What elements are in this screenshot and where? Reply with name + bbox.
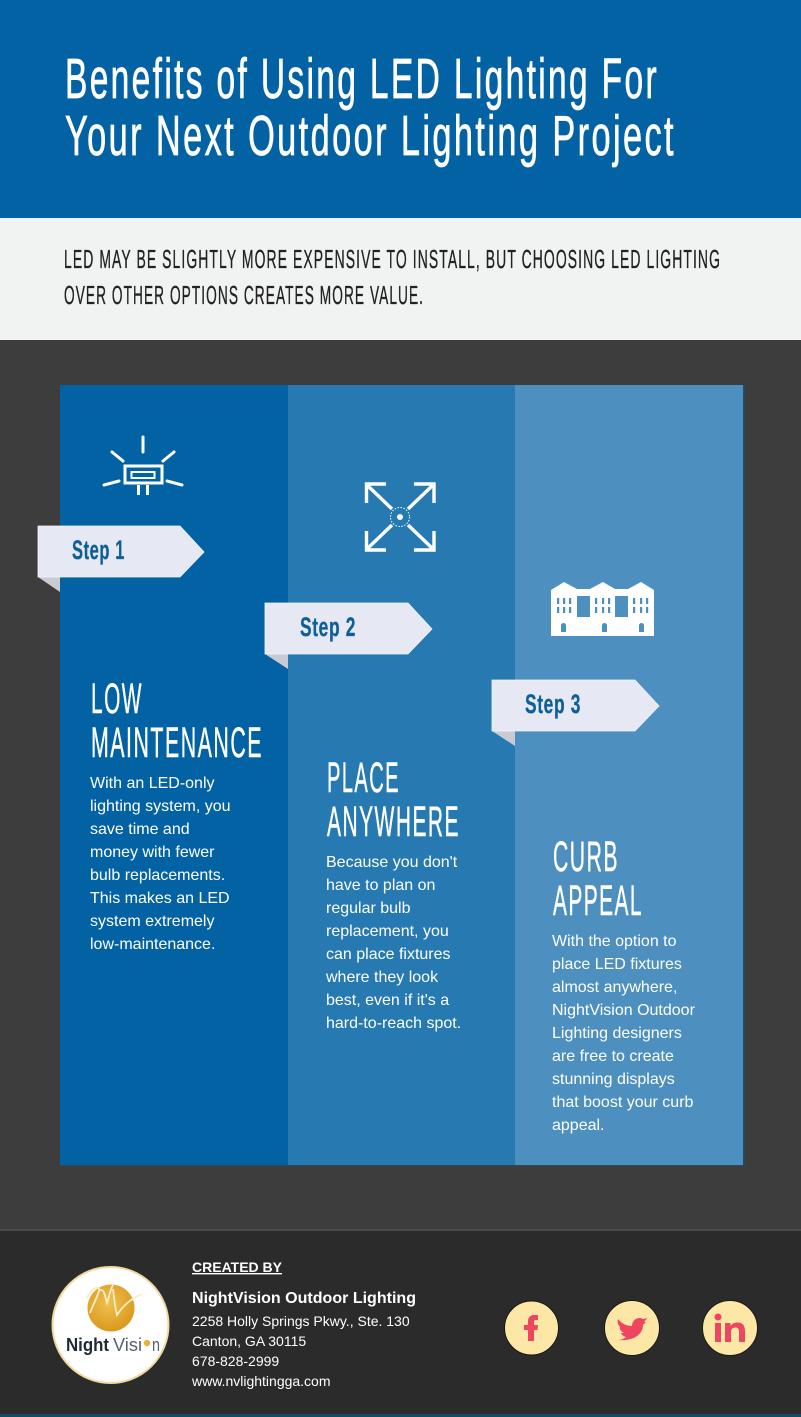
panel: step 1 low maintenance: MAINTENANCE bbox=[91, 719, 263, 767]
ribbon: step 1 bbox=[38, 526, 204, 592]
ribbon: step 3 bbox=[492, 680, 659, 746]
subtitle text bbox=[64, 244, 721, 310]
ribbon: step 3: Step 3 bbox=[525, 689, 581, 719]
body text: curb appeal: Lighting designers bbox=[552, 1025, 682, 1042]
ribbon: step 2: Step 2 bbox=[300, 612, 356, 642]
icon: linkedin bbox=[702, 1300, 758, 1356]
logo: n bbox=[152, 1335, 160, 1355]
body text: curb appeal: stunning displays bbox=[552, 1071, 675, 1088]
panel: step 2 place anywhere: ANYWHERE bbox=[327, 798, 460, 846]
body text: curb appeal: almost anywhere, bbox=[552, 979, 677, 996]
created by: www.nvlightingga.com bbox=[191, 1373, 331, 1389]
body text: place anywhere: regular bulb bbox=[326, 900, 411, 917]
body text: curb appeal: place LED fixtures bbox=[552, 956, 682, 973]
body text: low maintenance: system extremely bbox=[90, 913, 214, 930]
logo: Night bbox=[66, 1335, 109, 1355]
body text: low maintenance: lighting system, you bbox=[90, 798, 231, 815]
panel: step 2 place anywhere bbox=[288, 385, 515, 1165]
icon: expanding arrows bbox=[366, 484, 434, 550]
body text: place anywhere: can place fixtures bbox=[326, 946, 451, 963]
body text: curb appeal: NightVision Outdoor bbox=[552, 1002, 696, 1019]
icon: facebook bbox=[504, 1301, 558, 1355]
icon: outdoor light fixture bbox=[104, 437, 182, 495]
body text: place anywhere: replacement, you bbox=[326, 923, 449, 940]
logo bbox=[52, 1267, 168, 1383]
created by: 2258 Holly Springs Pkwy., Ste. 130 bbox=[192, 1313, 410, 1329]
created by: Canton, GA 30115 bbox=[192, 1333, 306, 1349]
icon: twitter bbox=[604, 1300, 660, 1356]
subtitle text: OVER OTHER OPTIONS CREATES MORE VALUE. bbox=[64, 280, 424, 310]
ribbon: step 1: Step 1 bbox=[72, 535, 125, 565]
body text: low maintenance: bulb replacements. bbox=[90, 867, 225, 884]
icon: buildings bbox=[551, 582, 654, 636]
panel: step 3 curb appeal bbox=[515, 385, 743, 1165]
body text: place anywhere: best, even if it's a bbox=[326, 992, 449, 1009]
body text: curb appeal: appeal. bbox=[552, 1117, 604, 1134]
body text: low maintenance: save time and bbox=[90, 821, 190, 838]
created by: CREATED BY bbox=[192, 1259, 283, 1275]
subtitle band bbox=[0, 218, 801, 340]
heading: curb appeal: CURB bbox=[553, 833, 619, 881]
created by: 678-828-2999 bbox=[192, 1353, 279, 1369]
panel: step 3 curb appeal: APPEAL bbox=[553, 877, 643, 925]
logo: Visi bbox=[113, 1335, 142, 1355]
body text: place anywhere bbox=[325, 854, 461, 1032]
body text: place anywhere: where they look bbox=[325, 969, 439, 986]
body text: low maintenance: low-maintenance. bbox=[90, 936, 215, 953]
body text: low maintenance: money with fewer bbox=[90, 844, 215, 861]
heading: low maintenance: LOW bbox=[91, 675, 143, 723]
panel: step 1 low maintenance bbox=[60, 385, 288, 1165]
title banner bbox=[0, 0, 801, 218]
footer bbox=[0, 1231, 801, 1417]
body text: place anywhere: Because you don't bbox=[326, 854, 458, 871]
heading: low maintenance bbox=[91, 675, 263, 767]
body text: low maintenance: With an LED-only bbox=[90, 775, 214, 792]
title bbox=[65, 47, 676, 168]
heading: place anywhere bbox=[327, 754, 460, 846]
body text: low maintenance bbox=[90, 775, 231, 953]
body text: curb appeal: With the option to bbox=[552, 933, 677, 950]
body text: curb appeal: are free to create bbox=[552, 1048, 674, 1065]
body text: place anywhere: hard-to-reach spot. bbox=[326, 1015, 461, 1032]
heading: curb appeal bbox=[553, 833, 643, 925]
created by bbox=[191, 1259, 416, 1389]
heading: place anywhere: PLACE bbox=[327, 754, 400, 802]
body text: low maintenance: This makes an LED bbox=[90, 890, 230, 907]
created by: NightVision Outdoor Lighting bbox=[192, 1290, 416, 1307]
ribbon: step 2 bbox=[265, 603, 432, 669]
body text: place anywhere: have to plan on bbox=[326, 877, 435, 894]
body text: curb appeal bbox=[552, 933, 696, 1134]
body text: curb appeal: that boost your curb bbox=[552, 1094, 694, 1111]
